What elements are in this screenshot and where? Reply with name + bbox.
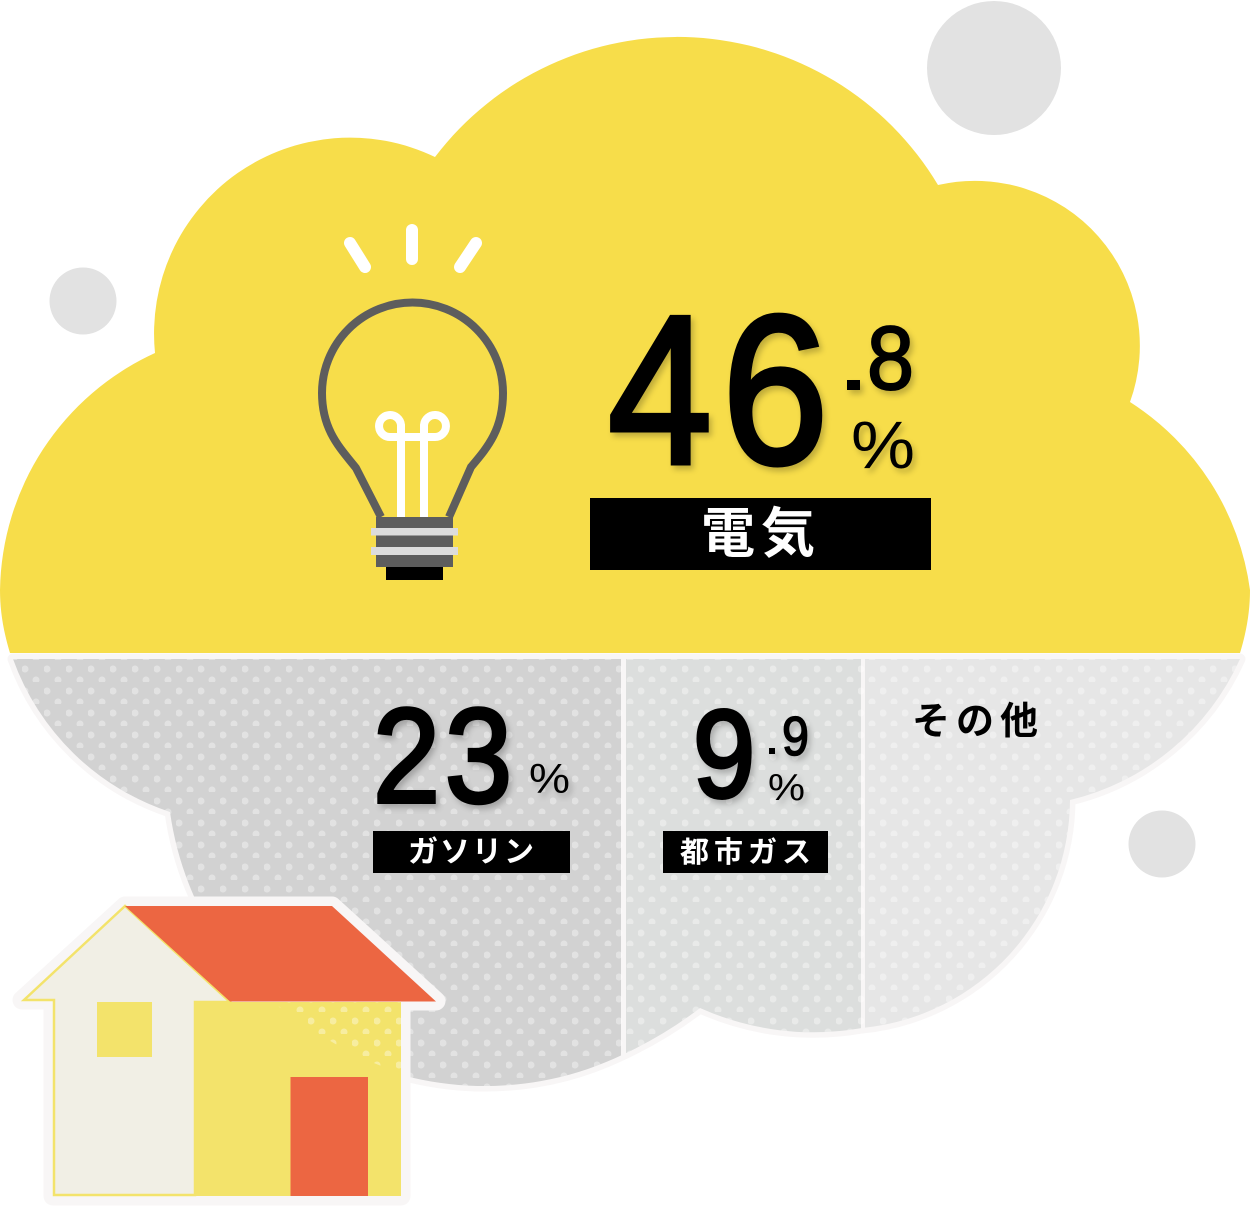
- house halo: [22, 906, 436, 1196]
- label: gasoline: [373, 831, 570, 873]
- decorative circle: left: [50, 268, 116, 334]
- value: gasoline 23%: [373, 681, 570, 831]
- house window: [97, 1002, 152, 1057]
- value: city gas 9.9%: 9: [693, 685, 755, 824]
- panel: lower cloud segments: [0, 659, 1250, 1099]
- label: gasoline: ガソリン: [408, 836, 536, 869]
- value: gasoline 23%: %: [529, 755, 570, 802]
- house door: [290, 1077, 368, 1196]
- value: electricity 46.8%: 4: [608, 272, 712, 509]
- value: gasoline 23%: 3: [445, 681, 512, 831]
- label: city gas: 都市ガス: [680, 836, 816, 869]
- icon: house: [22, 906, 436, 1196]
- value: electricity 46.8%: 6: [722, 271, 828, 508]
- value: city gas 9.9%: %: [768, 767, 805, 809]
- label: electricity: [590, 498, 931, 570]
- house right wall: [194, 1002, 401, 1196]
- house dot texture: [278, 1002, 401, 1068]
- dot texture: [0, 659, 1250, 1099]
- value: electricity 46.8%: 8: [867, 309, 914, 409]
- bulb glass outline: [322, 303, 503, 517]
- panel: electricity cloud top: [0, 37, 1250, 653]
- label: other: その他: [912, 701, 1044, 743]
- value: city gas 9.9%: 9: [782, 705, 809, 767]
- decorative circle: lower right: [1128, 810, 1196, 878]
- segment: other: [865, 659, 1240, 1028]
- bulb filament: [379, 415, 446, 517]
- value: city gas 9.9%: [693, 685, 809, 824]
- house left wall: [24, 906, 230, 1195]
- value: gasoline 23%: 2: [373, 681, 440, 831]
- value: electricity 46.8%: [608, 271, 915, 509]
- segment: gasoline: [0, 659, 621, 1099]
- value: electricity 46.8%: %: [851, 408, 915, 483]
- bulb rays: [350, 230, 476, 267]
- decorative circle: top right: [927, 1, 1061, 135]
- icon: light bulb: [322, 230, 503, 580]
- bulb base: [371, 517, 458, 580]
- label: electricity: 電気: [701, 504, 821, 564]
- label: city gas: [663, 831, 828, 873]
- segment: city gas: [626, 659, 861, 1053]
- house roof: [125, 906, 436, 1002]
